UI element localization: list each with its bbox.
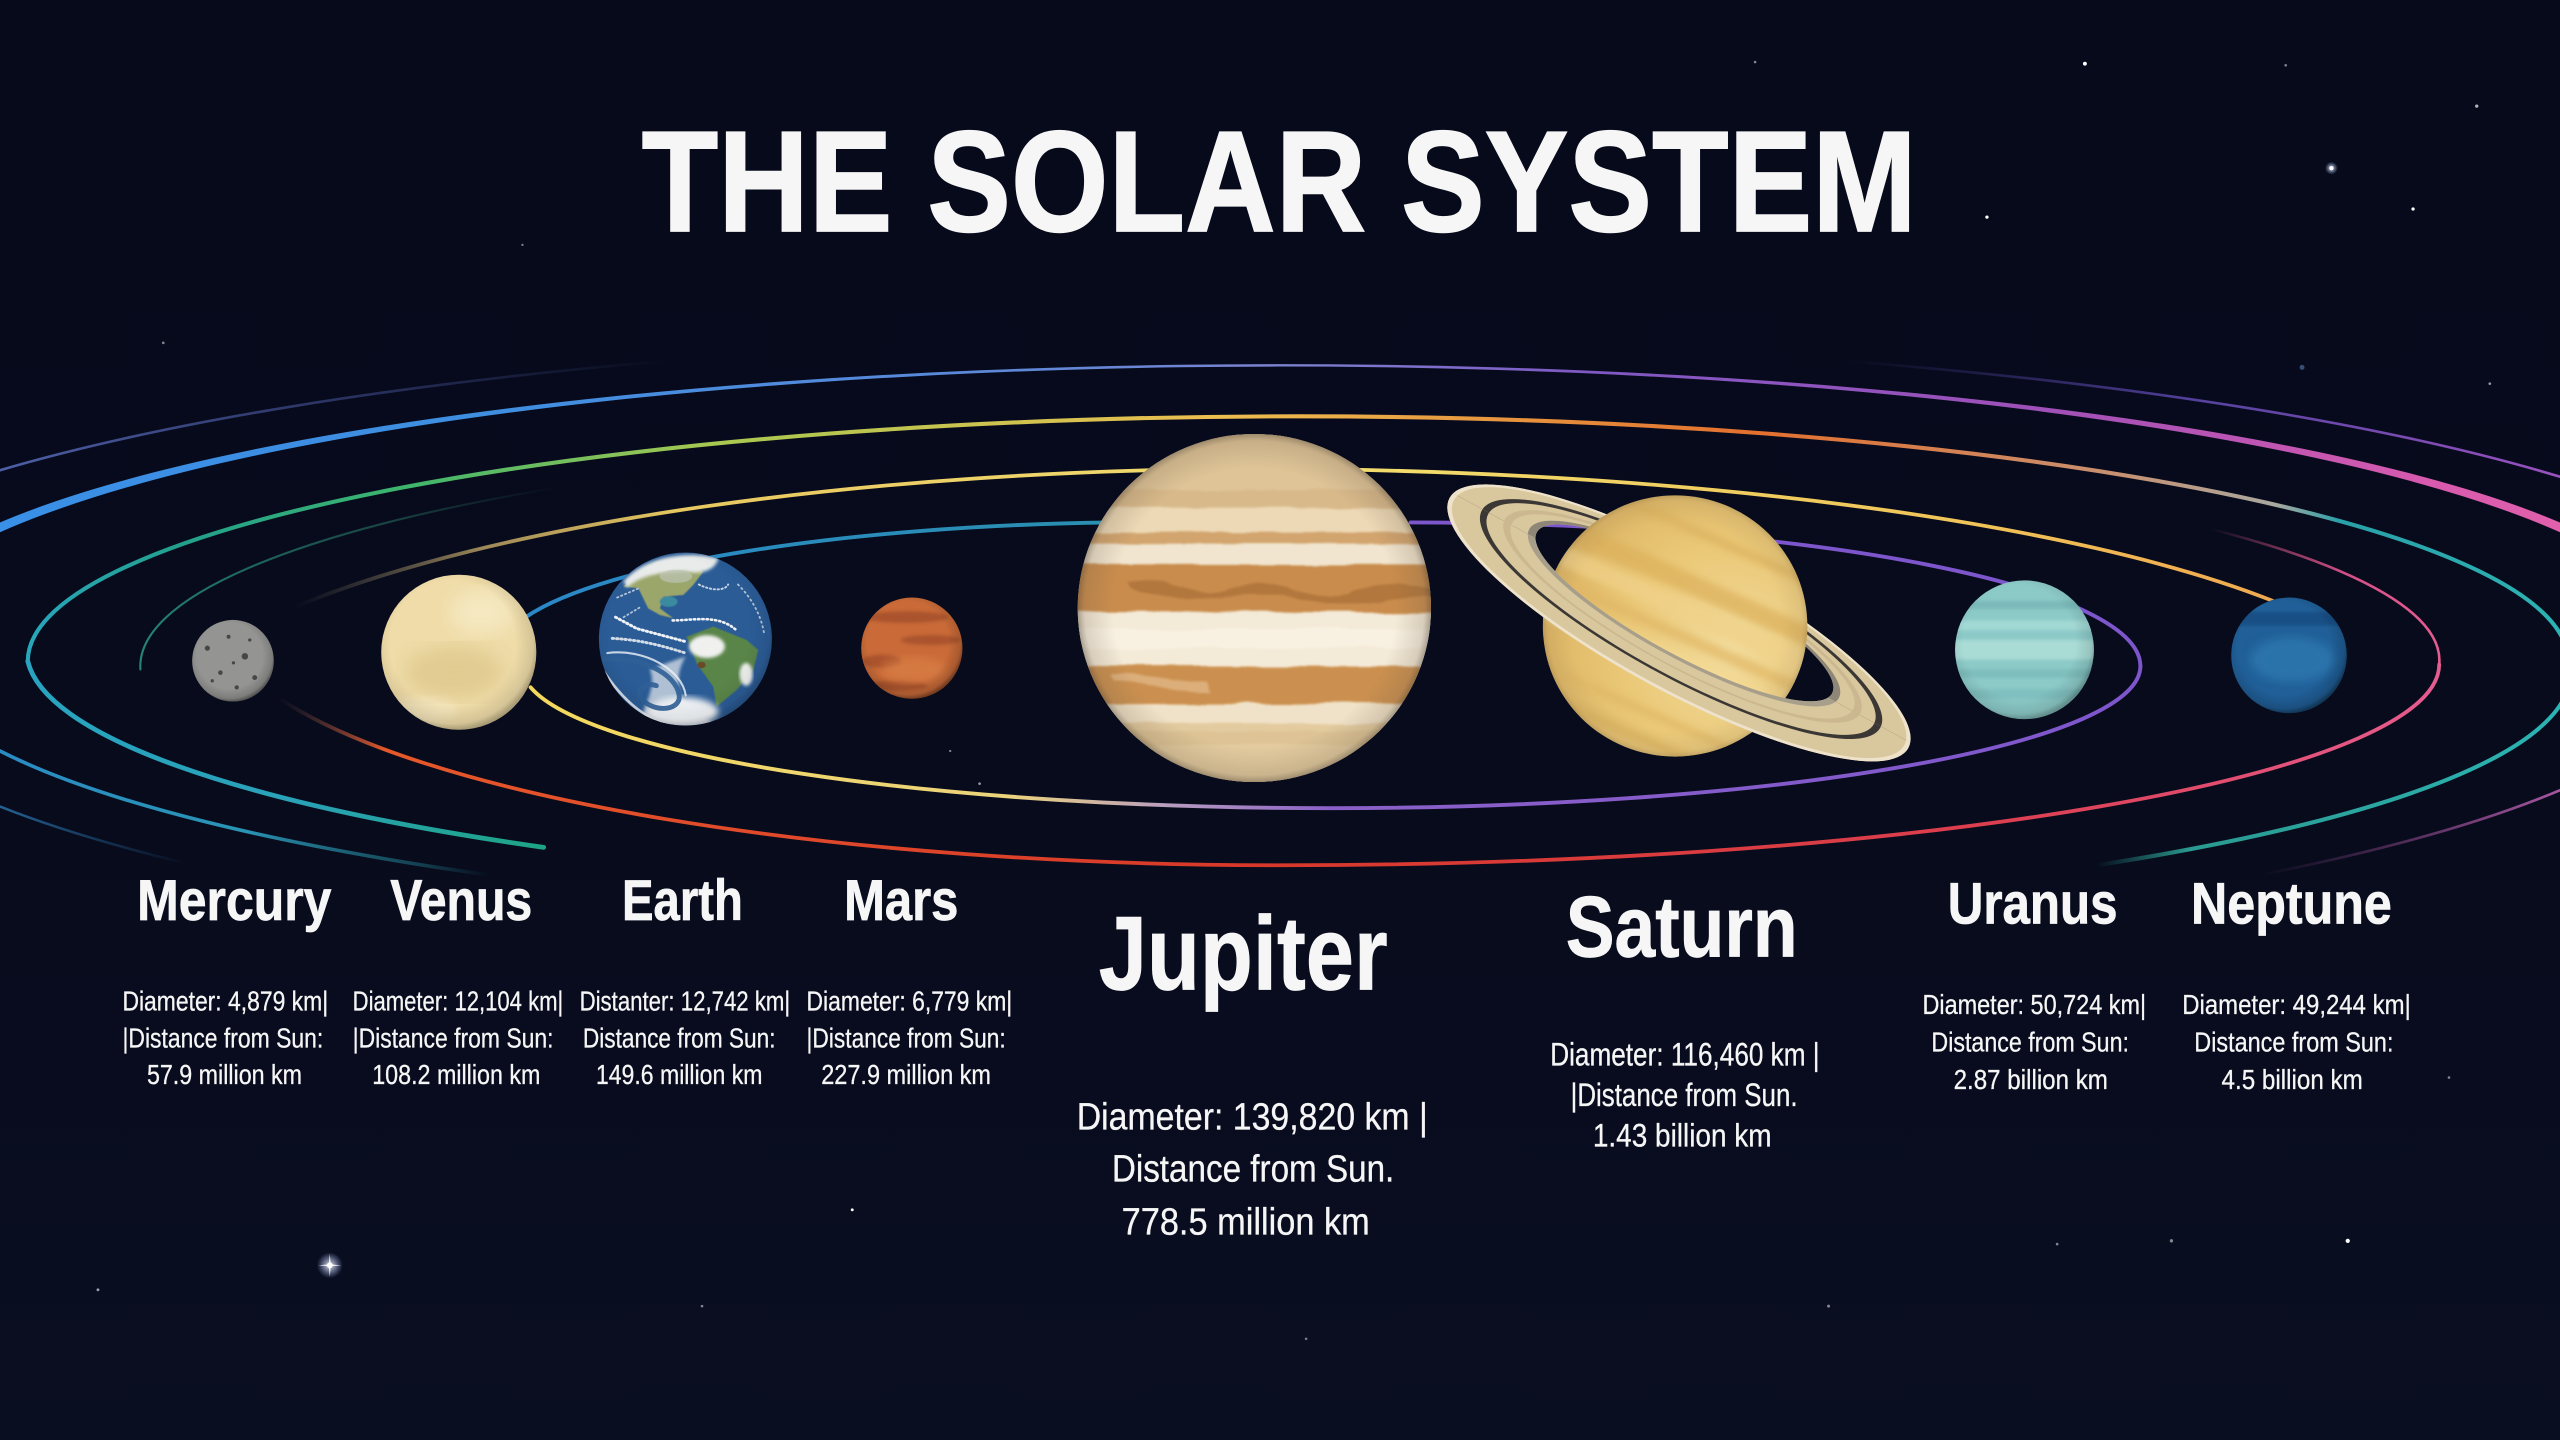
label: Venus: Diameter: 12,104 km| <box>353 986 563 1017</box>
planet: Neptune <box>2229 598 2353 713</box>
planet: Mercury <box>192 620 274 702</box>
label: Mars: Diameter: 6,779 km| <box>807 986 1012 1017</box>
label: Venus <box>353 869 563 1090</box>
planet: Venus <box>381 575 536 730</box>
label: Mercury: Mercury <box>137 869 332 933</box>
label: Neptune: Distance from Sun: <box>2194 1026 2393 1057</box>
orbit: blue to pink ring <box>0 364 2560 875</box>
label: Uranus <box>1922 871 2146 1095</box>
orbit: inner blue yellow purple ring <box>526 522 2140 808</box>
clouds <box>602 555 764 728</box>
label: Uranus: 2.87 billion km <box>1954 1064 2108 1095</box>
planet: Mars <box>861 598 962 699</box>
label: Mercury: Diameter: 4,879 km| <box>122 986 328 1017</box>
label: Venus: Venus <box>390 869 532 933</box>
continents <box>623 562 758 707</box>
label: Mars: 227.9 million km <box>821 1059 991 1090</box>
label: Earth: Distanter: 12,742 km| <box>580 986 790 1017</box>
label: Jupiter: Diameter: 139,820 km | <box>1077 1096 1428 1138</box>
label: Earth: Distance from Sun: <box>583 1022 776 1053</box>
label: Saturn: Saturn <box>1566 880 1798 976</box>
label: Mercury <box>122 869 332 1090</box>
label: Earth: 149.6 million km <box>596 1059 762 1090</box>
orbit: rainbow ring <box>28 416 2560 865</box>
planet body <box>1542 495 1808 757</box>
orbit: outer faint ring <box>0 361 2560 875</box>
label: Mercury: |Distance from Sun: <box>122 1022 323 1053</box>
rings: back half <box>1453 484 1911 742</box>
label: Uranus: Diameter: 50,724 km| <box>1922 989 2146 1020</box>
title: THE SOLAR SYSTEM <box>642 102 1917 262</box>
label: Saturn: |Distance from Sun. <box>1571 1077 1798 1113</box>
label: Neptune <box>2182 871 2411 1095</box>
label: Earth <box>580 869 790 1090</box>
orbit: yellow ring <box>294 469 2273 607</box>
orbit: thin teal arc <box>140 487 563 669</box>
label: Venus: |Distance from Sun: <box>353 1022 553 1053</box>
label: Mars <box>807 869 1012 1090</box>
label: Mars: Mars <box>844 869 958 933</box>
label: Uranus: Distance from Sun: <box>1931 1026 2129 1057</box>
orbit lines <box>0 361 2560 875</box>
planet: Uranus <box>1951 580 2098 719</box>
planet: Saturn with rings <box>1447 484 1911 762</box>
label: Jupiter: 778.5 million km <box>1122 1201 1370 1243</box>
label: Jupiter: Jupiter <box>1099 895 1388 1012</box>
rings: front half <box>1447 493 1910 762</box>
planet: Jupiter <box>1078 434 1432 782</box>
planet: Earth <box>599 552 772 728</box>
label: Venus: 108.2 million km <box>372 1059 540 1090</box>
label: Saturn <box>1550 880 1820 1154</box>
label: Mars: |Distance from Sun: <box>807 1022 1006 1053</box>
label: Saturn: 1.43 billion km <box>1593 1118 1772 1154</box>
label: Jupiter: Distance from Sun. <box>1112 1149 1394 1191</box>
label: Uranus: Uranus <box>1948 871 2118 936</box>
label: Neptune: Diameter: 49,244 km| <box>2182 989 2411 1020</box>
label: Jupiter <box>1077 895 1428 1243</box>
label: Earth: Earth <box>622 869 743 933</box>
orbit: red to pink ring <box>278 529 2439 865</box>
label: Mercury: 57.9 million km <box>147 1059 302 1090</box>
label: Neptune: 4.5 billion km <box>2222 1064 2363 1095</box>
label: Saturn: Diameter: 116,460 km | <box>1550 1037 1820 1073</box>
label: Neptune: Neptune <box>2191 871 2392 936</box>
